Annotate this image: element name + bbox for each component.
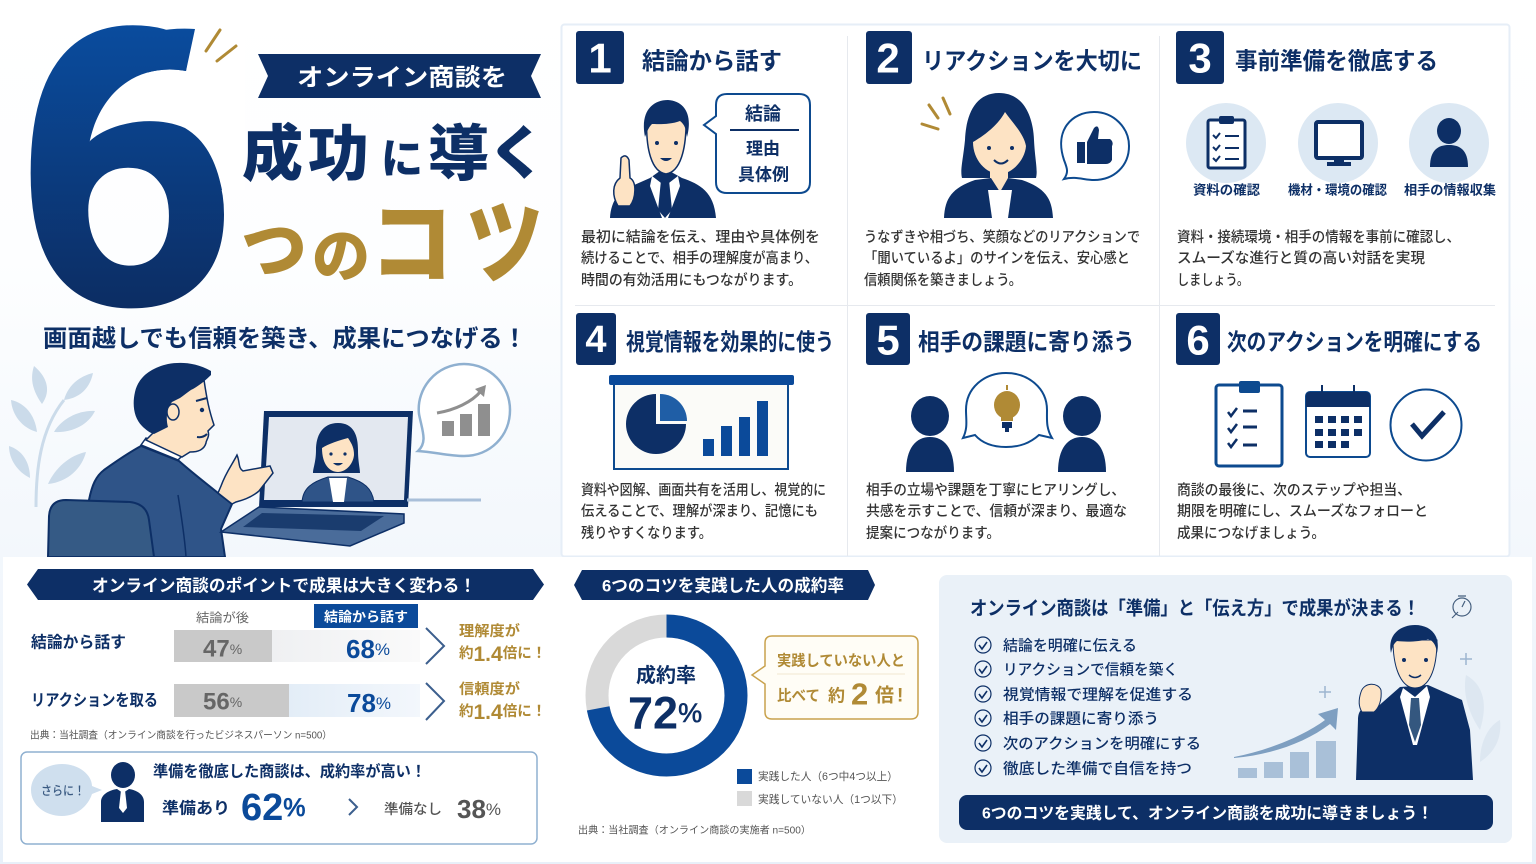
tip 2 text: うなずきや相づち、笑顔などのリアクションで <box>864 229 1140 246</box>
callout: twice the rate: 倍 <box>875 684 894 706</box>
tip 1 man with bubble icon <box>610 94 810 218</box>
source note: 出典：当社調査（オンライン商談の実施者 n=500） <box>578 824 811 836</box>
legend <box>737 769 903 806</box>
checklist: 徹底した準備で自信を持つ <box>1003 760 1192 778</box>
comparison heading <box>27 569 544 600</box>
donut chart <box>597 626 736 765</box>
tip 2 woman with thumbs-up icon <box>922 93 1129 218</box>
tip 3 text <box>1177 228 1460 289</box>
title line: 成功に導く: に <box>381 136 423 182</box>
row 2 <box>31 680 546 724</box>
callout: twice the rate: 約 <box>828 686 845 706</box>
tip 3 icon: documents check: 資料の確認 <box>1193 182 1260 198</box>
call to action bar <box>959 795 1493 830</box>
tip 6 text: 期限を明確にし、スムーズなフォローと <box>1177 502 1428 520</box>
bottom panel <box>3 557 1532 862</box>
column labels: 結論が後 <box>196 610 250 625</box>
callout: twice the rate: 2 <box>851 676 868 712</box>
tip 5 two people with idea bubble <box>906 373 1106 472</box>
title ribbon <box>258 54 541 98</box>
callout: preparation: 準備なし <box>384 801 442 817</box>
row 2: リアクションを取る <box>31 692 158 710</box>
tip 4 text <box>581 482 826 542</box>
tip 4 heading: 視覚情報を効果的に使う <box>626 329 834 355</box>
tip 3 heading: 事前準備を徹底する <box>1235 48 1438 74</box>
tip 3 icon: documents check <box>1186 103 1266 198</box>
row 1 <box>31 622 546 666</box>
title line: 成功に導く <box>242 120 546 188</box>
donut chart: 成約率 <box>636 663 696 687</box>
comparison heading: オンライン商談のポイントで成果は大きく変わる！ <box>92 576 476 596</box>
title line: 成功に導く: 導 <box>428 120 489 188</box>
tip 4 text: 残りやすくなります。 <box>581 524 712 542</box>
tip 5 heading: 5 <box>876 316 900 364</box>
row 2: 56% <box>203 688 242 716</box>
checklist: 視覚情報で理解を促進する <box>1003 686 1193 704</box>
checklist: 次のアクションを明確にする <box>1003 736 1201 752</box>
tip 3 icon: counterpart information <box>1404 103 1496 198</box>
tip 4 text: 伝えることで、理解が深まり、記憶にも <box>581 502 818 520</box>
tip 6 text: 商談の最後に、次のステップや担当、 <box>1177 482 1411 499</box>
tip 2 text <box>864 229 1140 289</box>
row 2: 信頼度が <box>459 680 521 698</box>
tip 4 presentation board icon <box>609 375 794 469</box>
title line: つのコツ: の <box>312 224 370 290</box>
title line: 成功に導く: 成 <box>242 120 303 188</box>
subtitle: 画面越しでも信頼を築き、成果につなげる！ <box>43 326 527 352</box>
chair <box>48 500 154 557</box>
callout: twice the rate <box>752 636 918 719</box>
tip 3 text: 資料・接続環境・相手の情報を事前に確認し、 <box>1177 228 1460 246</box>
tip 5 text: 相手の立場や課題を丁寧にヒアリングし、 <box>866 482 1125 499</box>
tip 3 icon: equipment check: 機材・環境の確認 <box>1288 182 1387 198</box>
closing rate heading <box>574 570 875 600</box>
tip 1 text: 最初に結論を伝え、理由や具体例を <box>581 229 820 246</box>
column labels: 結論から話す <box>324 608 408 624</box>
title line: 成功に導く: く <box>488 122 546 186</box>
legend: 実践していない人（1つ以下） <box>758 792 903 806</box>
tip 2 heading: 2 <box>876 34 900 82</box>
row 1: 47% <box>203 636 242 662</box>
tip 2 text: 信頼関係を築きましょう。 <box>864 271 1022 289</box>
legend: 実践した人（6つ中4つ以上） <box>758 769 898 783</box>
tip 6 text <box>1177 482 1428 542</box>
panel: six tips <box>562 24 1510 556</box>
source note: 出典：当社調査（オンライン商談を行ったビジネスパーソン n=500） <box>30 728 332 742</box>
tip 1 heading: 1 <box>588 34 612 82</box>
checklist: 結論を明確に伝える <box>1003 638 1137 654</box>
illustration: confident man <box>1356 625 1473 780</box>
tip 6 icons: checklist, calendar, check <box>1216 381 1462 466</box>
tip 1 heading <box>576 31 782 84</box>
donut chart: 72% <box>628 688 702 738</box>
tip 6 text: 成果につなげましょう。 <box>1177 525 1325 542</box>
section: outcome comparison <box>21 569 546 844</box>
checklist: リアクションで信頼を築く <box>1003 660 1178 678</box>
tip 1 text: 時間の有効活用にもつながります。 <box>581 271 802 289</box>
tip 5 text: 提案につながります。 <box>866 524 1000 542</box>
panel: summary <box>939 575 1512 843</box>
illustration: open hand <box>218 455 273 504</box>
tip 3 text: スムーズな進行と質の高い対話を実現 <box>1177 249 1425 267</box>
checklist <box>975 637 1201 778</box>
callout: preparation: 準備を徹底した商談は、成約率が高い！ <box>153 762 426 780</box>
tip 5 heading: 相手の課題に寄り添う <box>918 329 1135 355</box>
title line: つのコツ: ツ <box>466 194 543 296</box>
title line: つのコツ: コ <box>370 194 453 296</box>
summary heading: オンライン商談は「準備」と「伝え方」で成果が決まる！ <box>970 596 1420 620</box>
tip 2 heading <box>866 31 1142 84</box>
illustration: woman on screen <box>302 423 374 502</box>
tip 1 text <box>581 229 820 289</box>
callout: preparation: 62% <box>241 787 306 829</box>
tip 6 heading <box>1176 313 1482 365</box>
title line: つのコツ <box>241 194 543 296</box>
closing rate heading: 6つのコツを実践した人の成約率 <box>602 576 844 596</box>
tip 3 text: しましょう。 <box>1177 272 1249 289</box>
callout: twice the rate: 実践していない人と <box>777 652 905 670</box>
tip 2 heading: リアクションを大切に <box>922 48 1142 74</box>
callout: twice the rate: 比べて <box>777 688 820 704</box>
callout: preparation: 38% <box>457 794 501 824</box>
tip 5 text <box>866 482 1127 542</box>
tip 5 text: 共感を示すことで、信頼が深まり、最適な <box>866 502 1127 520</box>
speech bubble: growth chart <box>418 364 510 456</box>
icon: stopwatch <box>1452 596 1471 618</box>
tip 4 heading <box>576 313 834 365</box>
row 1: 約1.4倍に！ <box>459 642 546 666</box>
tip 4 text: 資料や図解、画面共有を活用し、視覚的に <box>581 482 826 499</box>
tip 3 heading <box>1176 31 1438 84</box>
tip 3 heading: 3 <box>1188 34 1212 82</box>
title line: つのコツ: つ <box>241 213 307 287</box>
row 2: 約1.4倍に！ <box>459 700 546 724</box>
checklist: 相手の課題に寄り添う <box>1003 710 1159 728</box>
section: closing rate <box>574 570 918 836</box>
row 2: 78% <box>347 688 391 718</box>
row 1: 理解度が <box>459 622 521 640</box>
column labels <box>196 604 418 628</box>
callout: twice the rate: ! <box>897 686 903 706</box>
callout: preparation: さらに！ <box>41 784 85 798</box>
row 1: 結論から話す <box>31 632 126 652</box>
tip 1 man with bubble icon: 理由 <box>746 140 780 158</box>
tip 1 heading: 結論から話す <box>642 48 782 74</box>
call to action bar: 6つのコツを実践して、オンライン商談を成功に導きましょう！ <box>982 804 1433 822</box>
illustration: man in suit <box>89 363 232 557</box>
tip 6 heading: 次のアクションを明確にする <box>1227 329 1482 355</box>
tip 1 man with bubble icon: 具体例 <box>738 166 789 184</box>
tip 1 text: 続けることで、相手の理解度が高まり、 <box>581 249 818 267</box>
tip 3 icon: equipment check <box>1288 103 1387 198</box>
callout: preparation: 準備あり <box>162 798 230 818</box>
illustration: laptop <box>221 411 481 546</box>
tip 1 man with bubble icon: 結論 <box>745 104 781 124</box>
decorative plant <box>9 366 95 507</box>
growth chart with arrow <box>1234 653 1500 778</box>
tip 3 icon: counterpart information: 相手の情報収集 <box>1404 182 1496 198</box>
tip 6 heading: 6 <box>1186 316 1210 364</box>
tip 2 text: 「聞いているよ」のサインを伝え、安心感と <box>864 249 1130 267</box>
tip 5 heading <box>866 313 1135 365</box>
title ribbon: オンライン商談を <box>297 64 507 92</box>
title line: 成功に導く: 功 <box>308 120 369 188</box>
tip 4 heading: 4 <box>585 319 607 361</box>
accent rays by numeral <box>206 30 236 61</box>
row 1: 68% <box>346 634 390 664</box>
callout: preparation <box>21 752 537 844</box>
